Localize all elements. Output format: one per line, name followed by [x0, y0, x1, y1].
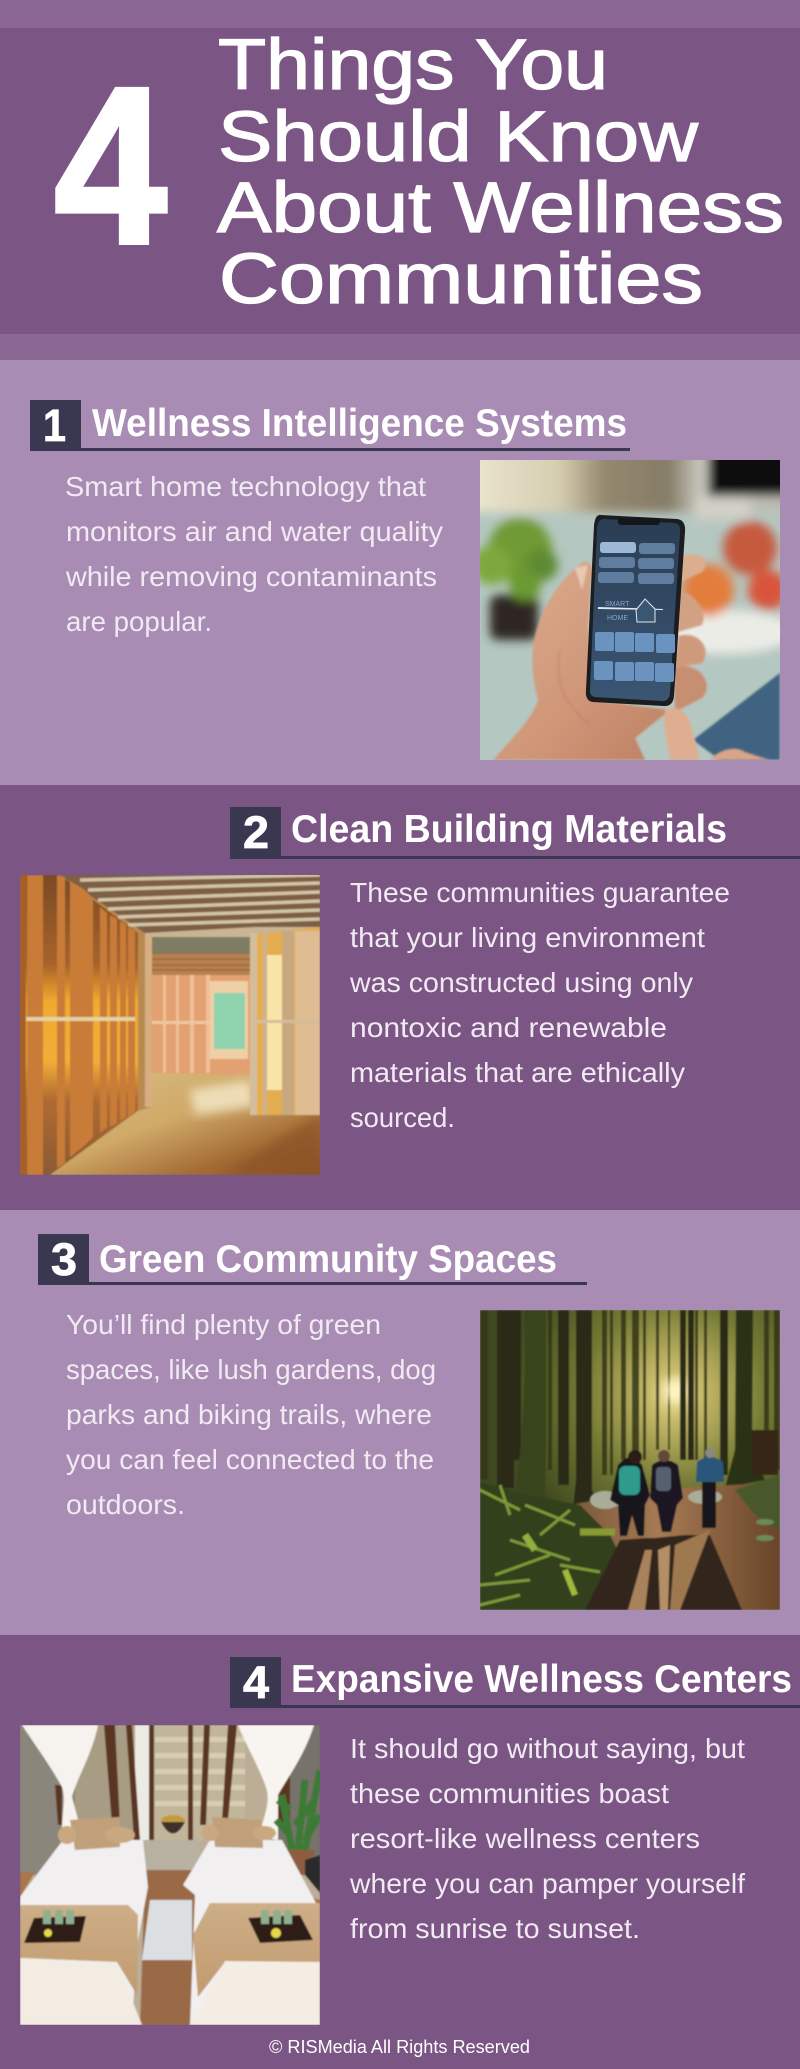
ground and foliage: [480, 1482, 780, 1610]
bowl: [161, 1815, 185, 1827]
body text 2: was constructed using only: [349, 967, 693, 998]
body text 3: You’ll find plenty of green: [66, 1309, 381, 1340]
panel: green community spaces: [0, 1210, 800, 1635]
body text 2: [349, 877, 730, 1133]
pillows: [70, 1817, 120, 1850]
heading 2: Clean Building Materials: [291, 808, 727, 851]
body text 3: outdoors.: [66, 1489, 185, 1520]
body text 4: [349, 1733, 745, 1944]
body text 3: parks and biking trails, where: [66, 1399, 432, 1430]
body text 4: resort-like wellness centers: [350, 1823, 700, 1854]
body text 2: sourced.: [350, 1102, 455, 1133]
right wall: [252, 927, 320, 1115]
number badge 2: 2: [243, 807, 269, 858]
phone: SMART: [605, 601, 630, 608]
big numeral 4: 4: [54, 41, 167, 291]
trays: [24, 1916, 86, 1943]
left bed: [20, 1840, 148, 2025]
ceiling: [60, 875, 320, 933]
number badge 4: [230, 1657, 281, 1708]
left stud wall: [20, 875, 138, 1175]
number badge 3: [38, 1234, 89, 1285]
shadows: [585, 1535, 742, 1610]
curtains: [22, 1725, 98, 1833]
floor: [142, 1840, 200, 1870]
title: [217, 26, 784, 319]
plant: [276, 1770, 320, 1850]
body text 4: from sunrise to sunset.: [350, 1913, 640, 1944]
body text 1: while removing contaminants: [65, 561, 437, 592]
heading 1: Wellness Intelligence Systems: [92, 402, 627, 445]
body text 1: [65, 471, 443, 637]
phone: [586, 515, 685, 706]
photo: timber framed house interior: [20, 875, 320, 1175]
body text 4: where you can pamper yourself: [349, 1868, 745, 1899]
body text 4: It should go without saying, but: [350, 1733, 745, 1764]
number badge 3: 3: [51, 1234, 77, 1285]
panel: expansive wellness centers: [0, 1635, 800, 2069]
hand: [493, 554, 770, 760]
footer credit: © RISMedia All Rights Reserved: [269, 2037, 530, 2057]
body text 2: that your living environment: [350, 922, 705, 953]
photo: people walking on forest path: [480, 1310, 780, 1610]
body text 2: nontoxic and renewable: [350, 1012, 667, 1043]
body text 2: These communities guarantee: [350, 877, 730, 908]
right bed: [183, 1840, 320, 2025]
panel: clean building materials: [0, 785, 800, 1210]
number badge 1: [30, 400, 81, 451]
body text 1: Smart home technology that: [65, 471, 426, 502]
hikers: [610, 1448, 724, 1536]
body text 3: [66, 1309, 436, 1520]
body text 3: spaces, like lush gardens, dog: [66, 1354, 436, 1385]
body text 3: you can feel connected to the: [66, 1444, 434, 1475]
body text 1: are popular.: [66, 606, 212, 637]
body text 1: monitors air and water quality: [66, 516, 443, 547]
title: Should Know: [218, 98, 699, 177]
heading 3: Green Community Spaces: [99, 1238, 557, 1281]
photo: spa treatment room with two beds: [20, 1725, 320, 2025]
title: About Wellness: [217, 169, 784, 248]
phone: HOME: [607, 615, 628, 622]
title: Things You: [218, 26, 608, 105]
photo: hand holding smart home phone: [480, 460, 780, 760]
number badge 2: [230, 807, 281, 859]
panel: wellness intelligence systems: [0, 360, 800, 785]
title: Communities: [219, 240, 703, 319]
body text 2: materials that are ethically: [350, 1057, 685, 1088]
body text 4: these communities boast: [350, 1778, 669, 1809]
number badge 4: 4: [243, 1657, 269, 1708]
header background: [0, 0, 800, 360]
number badge 1: 1: [43, 400, 66, 451]
lintel and back room: [147, 937, 253, 954]
